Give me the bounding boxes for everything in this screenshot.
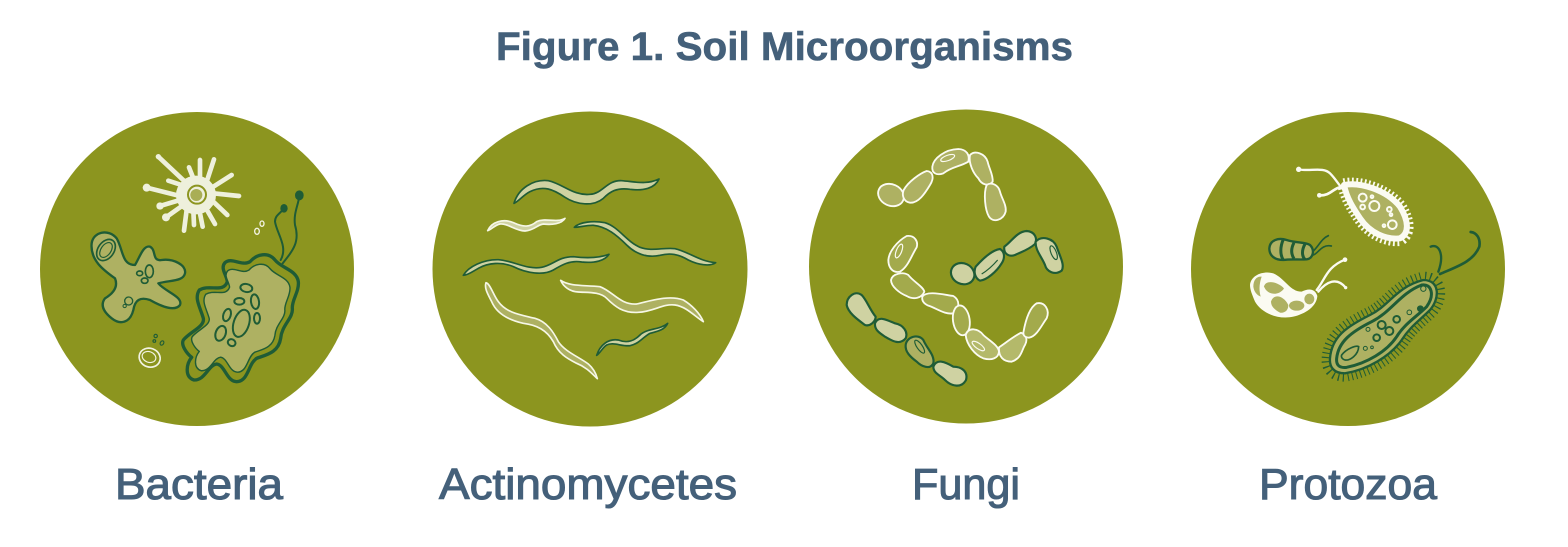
icon: dark chain lower left: [847, 293, 966, 386]
label: Protozoa: Protozoa: [1259, 460, 1438, 509]
panel: fungi: [809, 110, 1123, 424]
label: Bacteria: Bacteria: [115, 460, 284, 509]
title: Figure 1. Soil Microorganisms: [496, 25, 1073, 69]
illustration: bacteria organisms: [92, 154, 304, 382]
panel: protozoa: [1191, 112, 1505, 426]
illustration: fungi chains: [847, 149, 1063, 386]
illustration: actinomycetes filaments: [463, 179, 716, 379]
label: Actinomycetes: Actinomycetes: [439, 460, 737, 509]
circle: protozoa background: [1191, 112, 1505, 426]
circle: fungi background: [809, 110, 1123, 424]
icon: white chain centre: [888, 236, 1048, 362]
icon: cream star bacterium: [143, 154, 239, 231]
panel: bacteria: [40, 112, 354, 426]
icon: white striped protozoan: [1250, 257, 1347, 318]
icon: small amoeba: [92, 232, 185, 322]
label: Fungi: Fungi: [912, 460, 1020, 509]
panel: actinomycetes: [432, 112, 748, 426]
icon: dark ciliated protozoan: [1330, 232, 1480, 373]
icon: dark chain right: [947, 231, 1063, 288]
circle: actinomycetes background: [432, 112, 748, 426]
icon: small cream cells: [136, 221, 264, 370]
icon: white outlined filaments: [485, 218, 703, 379]
icon: white ciliate: [1296, 167, 1407, 239]
icon: small dark cells: [153, 334, 165, 346]
icon: dark outlined filaments: [463, 179, 716, 355]
icon: white chain top: [874, 149, 1006, 220]
illustration: protozoa organisms: [1250, 167, 1480, 373]
circle: bacteria background: [40, 112, 354, 426]
icon: dark segmented protozoan: [1269, 236, 1331, 260]
icon: large amoeba with flagella: [183, 190, 304, 382]
